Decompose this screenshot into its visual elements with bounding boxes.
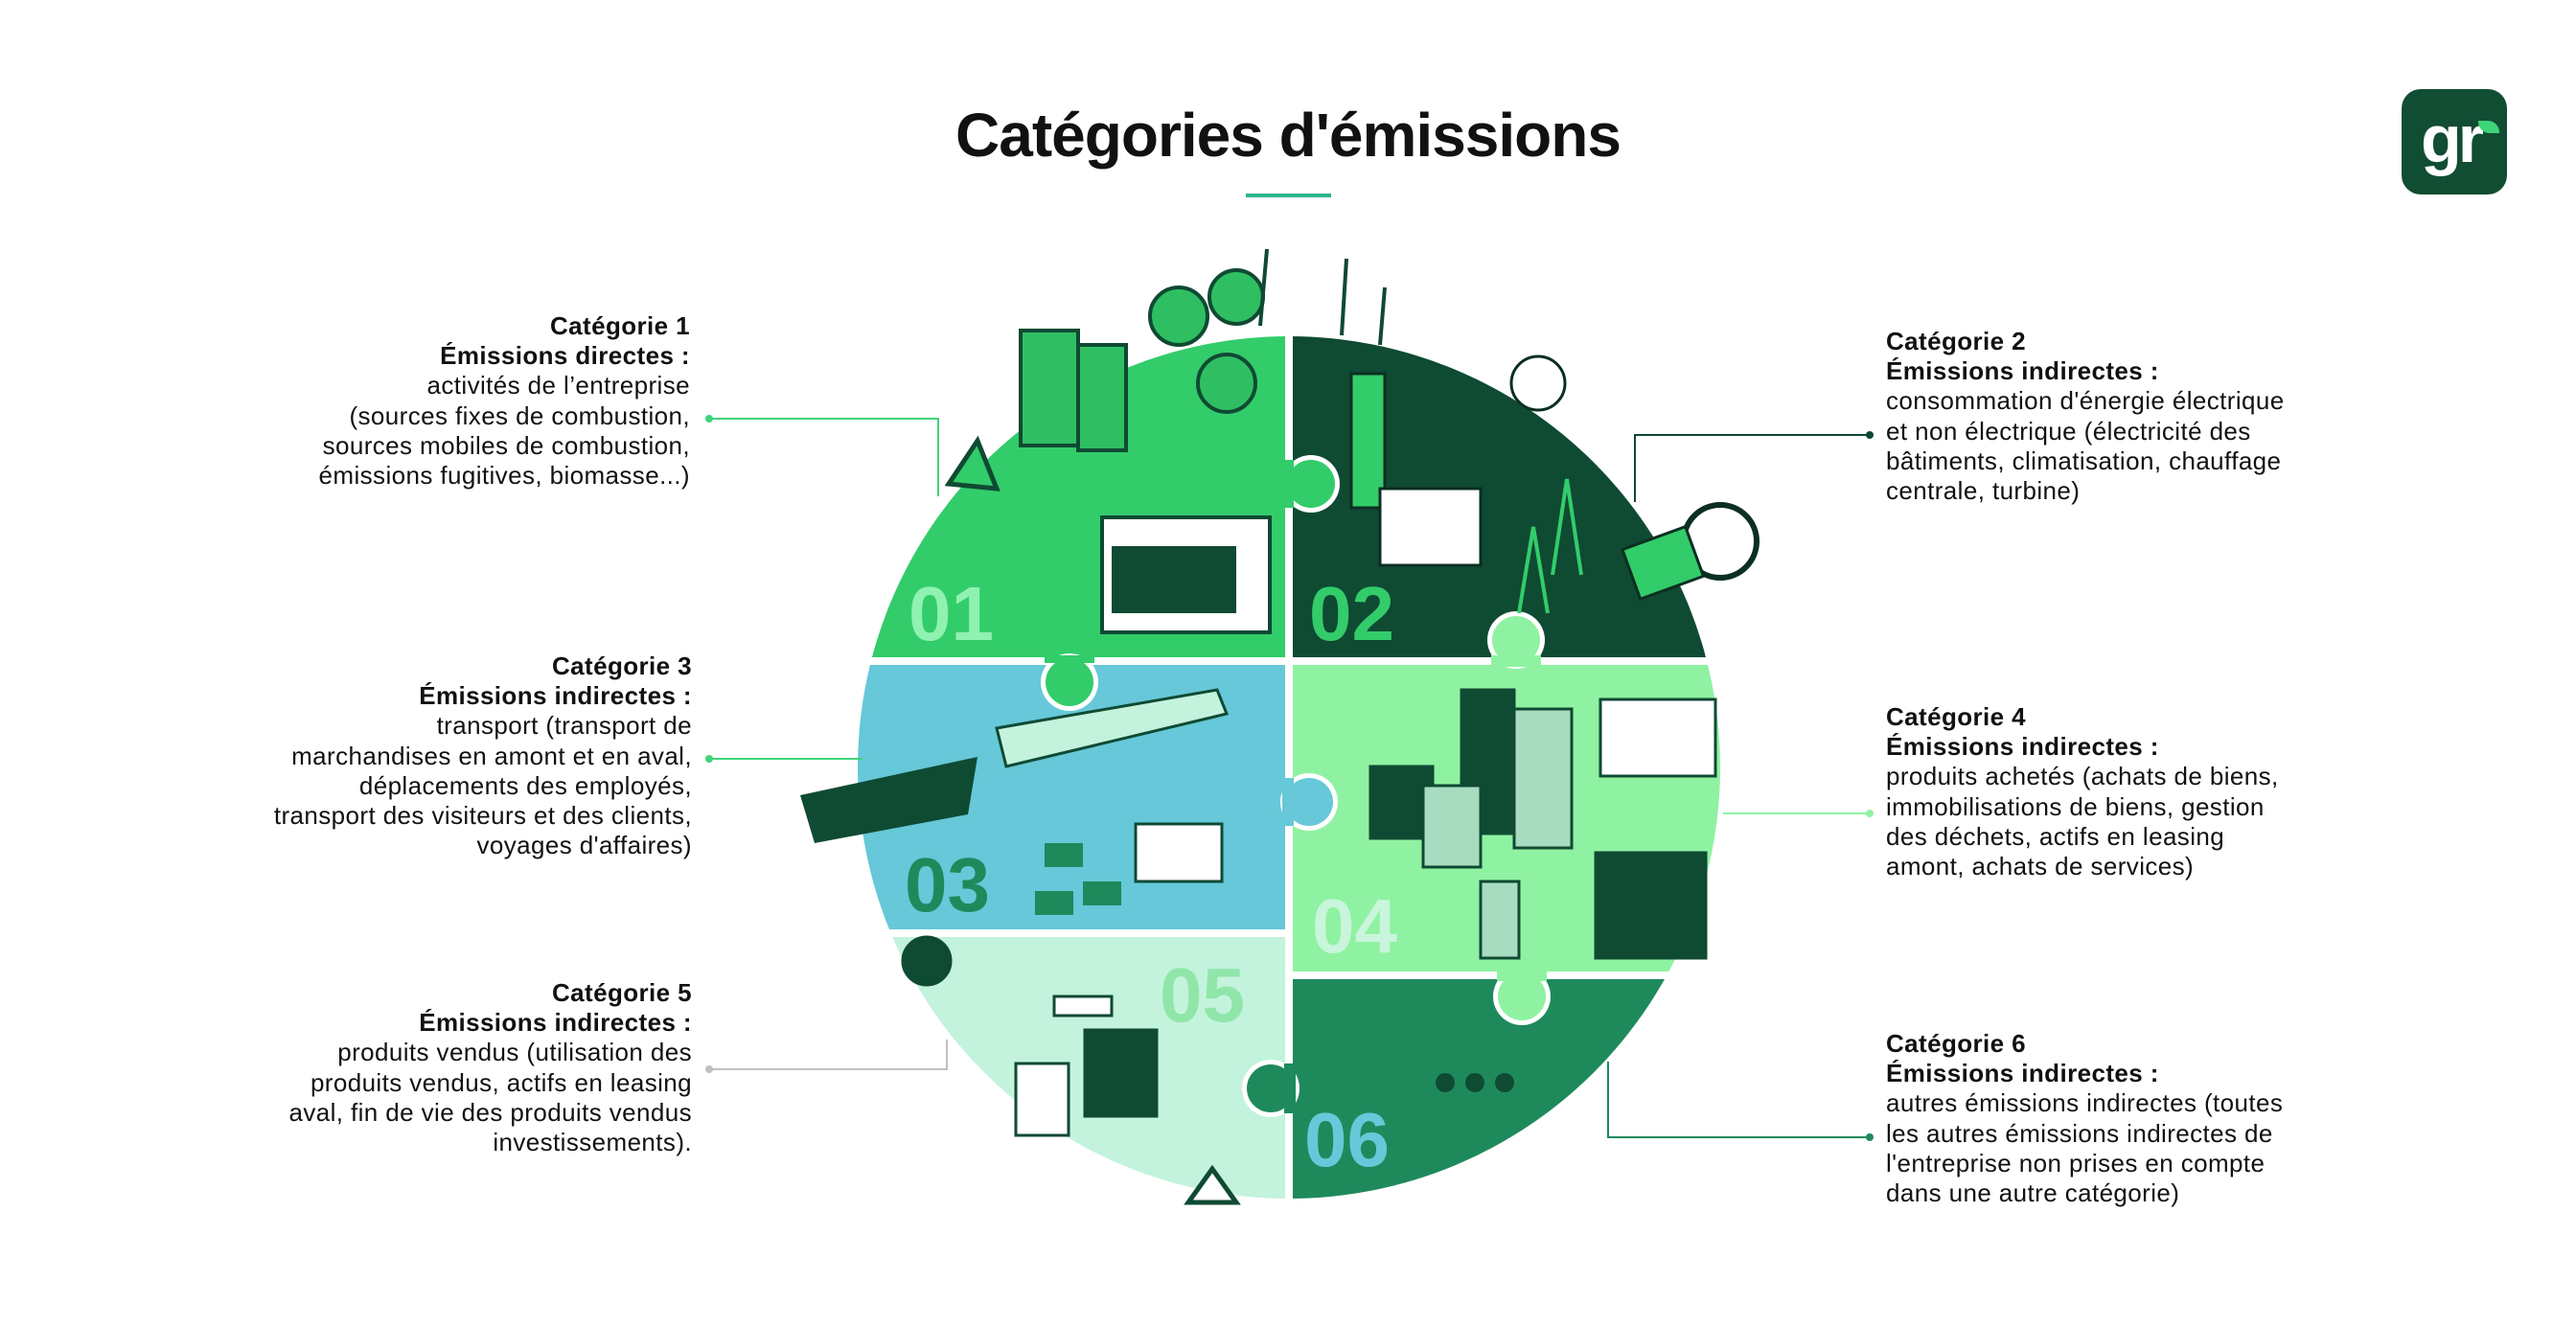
title: Catégories d'émissions [955, 101, 1621, 170]
numbers: 02 [1309, 571, 1394, 656]
title underline [1246, 194, 1331, 197]
piece 05 [892, 937, 1285, 1199]
numbers: 06 [1304, 1097, 1390, 1182]
q3 icons [800, 690, 1227, 915]
text: categorie 5: aval, fin de vie des produits vendus [288, 1098, 692, 1127]
text: categorie 2 [1886, 327, 2285, 505]
text: categorie 2: Catégorie 2 [1886, 327, 2026, 355]
piece 02 [1293, 326, 1734, 657]
text: categorie 4: immobilisations de biens, gestion [1886, 792, 2265, 821]
numbers: 03 [905, 842, 990, 927]
illustrations: buildings q1 [949, 270, 1270, 632]
numbers: 05 [1160, 952, 1245, 1038]
text: categorie 3: transport (transport de [437, 711, 692, 740]
text: categorie 4: amont, achats de services) [1886, 852, 2194, 880]
text: categorie 2: et non électrique (électricité des [1886, 417, 2251, 446]
text: categorie 6: dans une autre catégorie) [1886, 1178, 2179, 1207]
text: categorie 6: autres émissions indirectes (toutes [1886, 1088, 2283, 1117]
text: categorie 1 [319, 311, 690, 490]
text: categorie 3 [274, 652, 692, 859]
text: categorie 2: bâtiments, climatisation, chauffage [1886, 446, 2281, 475]
text: categorie 3: marchandises en amont et en aval, [291, 742, 692, 770]
text: categorie 6: les autres émissions indirectes de [1886, 1119, 2273, 1148]
numbers: 04 [1312, 883, 1397, 969]
text: categorie 3: déplacements des employés, [359, 771, 692, 800]
q2 icons [1260, 249, 1757, 613]
q6 dots [1436, 1073, 1514, 1092]
numbers: 01 [908, 571, 994, 656]
piece 01 [872, 336, 1285, 657]
text: categorie 5: produits vendus (utilisation des [337, 1038, 692, 1066]
text: categorie 4: des déchets, actifs en leasing [1886, 822, 2224, 851]
text: categorie 3: transport des visiteurs et des clients, [274, 801, 692, 830]
text: categorie 2: consommation d'énergie électrique [1886, 386, 2285, 415]
text: categorie 4 [1886, 702, 2279, 880]
text: categorie 2: centrale, turbine) [1886, 476, 2080, 505]
piece 06 [1293, 979, 1665, 1199]
logo [2402, 89, 2507, 194]
text: categorie 5: produits vendus, actifs en leasing [310, 1068, 692, 1097]
text: categorie 5: investissements). [493, 1128, 692, 1156]
piece 03 [843, 665, 1285, 929]
q5 icons [903, 937, 1236, 1202]
text: categorie 6 [1886, 1029, 2283, 1207]
text: categorie 6: Catégorie 6 [1886, 1029, 2026, 1058]
text: categorie 6: l'entreprise non prises en compte [1886, 1149, 2265, 1177]
text: categorie 1: activités de l’entreprise [427, 371, 690, 400]
text: categorie 1: sources mobiles de combustion, [323, 431, 690, 460]
text: categorie 1: Émissions directes : [440, 341, 690, 370]
text: categorie 5 [288, 978, 692, 1156]
text: categorie 3: Catégorie 3 [552, 652, 692, 680]
text: categorie 1: (sources fixes de combustion, [349, 401, 690, 430]
numbers [905, 571, 1397, 1182]
connector lines [709, 419, 1870, 1137]
text: categorie 4: produits achetés (achats de biens, [1886, 762, 2279, 790]
text: categorie 5: Catégorie 5 [552, 978, 692, 1007]
text: categorie 4: Catégorie 4 [1886, 702, 2026, 731]
piece 04 [1293, 654, 1720, 972]
knobs with outlines [1041, 653, 1098, 711]
puzzle circle [705, 249, 1874, 1205]
text: categorie 1: Catégorie 1 [550, 311, 690, 340]
text: categorie 3: voyages d'affaires) [476, 831, 692, 859]
logo: gr [2421, 102, 2480, 176]
text: categorie 1: émissions fugitives, biomasse...) [319, 461, 690, 490]
text: categorie 5: Émissions indirectes : [419, 1008, 692, 1037]
text: categorie 3: Émissions indirectes : [419, 681, 692, 710]
text: categorie 2: Émissions indirectes : [1886, 356, 2159, 385]
q4 icons [1370, 690, 1715, 958]
text: categorie 6: Émissions indirectes : [1886, 1059, 2159, 1087]
text: categorie 4: Émissions indirectes : [1886, 732, 2159, 761]
